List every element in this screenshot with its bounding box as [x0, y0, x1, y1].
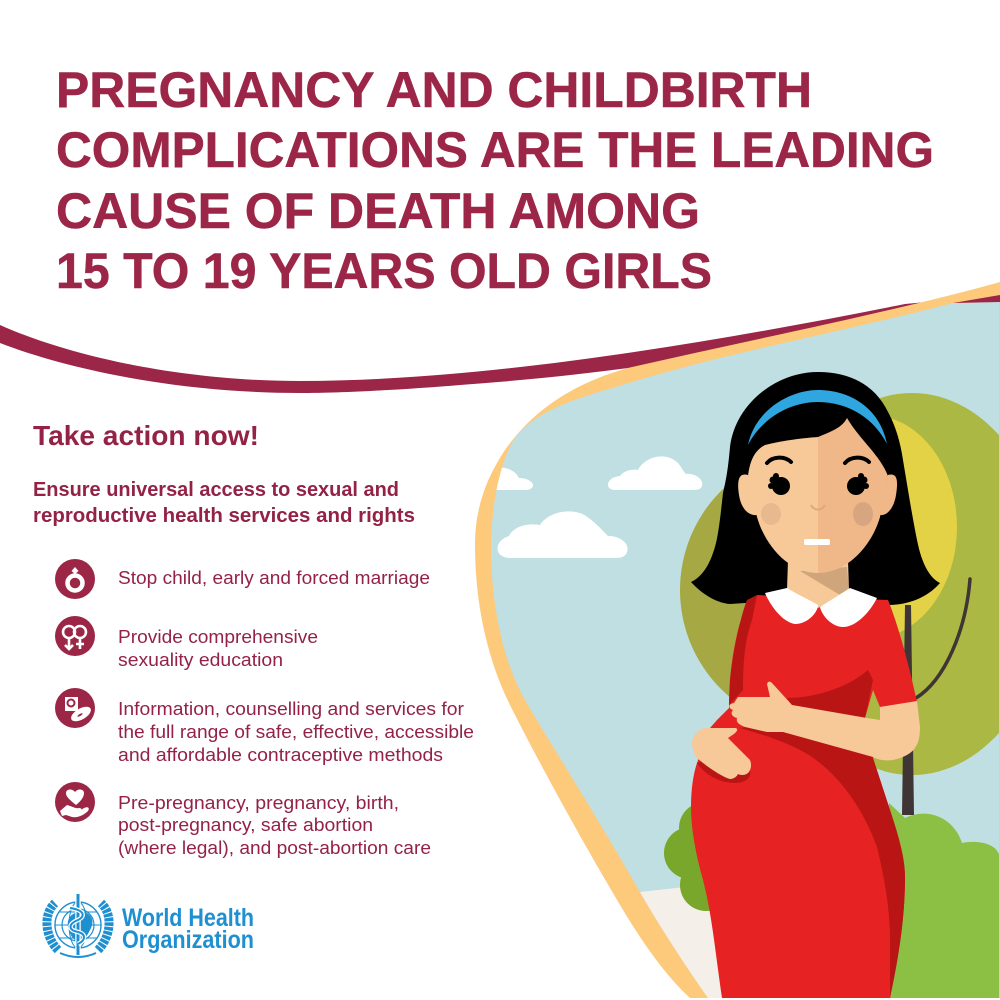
neck shadow — [800, 567, 849, 595]
action item: marriage — [55, 559, 430, 599]
hairband — [748, 390, 887, 445]
action item: education — [55, 616, 318, 670]
title: COMPLICATIONS ARE THE LEADING — [56, 122, 934, 178]
icon: condom and pills — [55, 688, 95, 728]
subheading — [33, 479, 415, 527]
upper arm and hand — [729, 682, 920, 760]
organization name: World Health — [122, 904, 254, 932]
tree right crown — [866, 393, 999, 775]
organization name: Organization — [122, 926, 254, 954]
cloud large — [497, 511, 628, 558]
left bush — [664, 806, 710, 911]
mouth — [804, 539, 830, 545]
call to action heading: Take action now! — [33, 420, 259, 451]
subheading: reproductive health services and rights — [33, 505, 415, 527]
waist shadow — [787, 670, 873, 718]
action item: care: post-pregnancy, safe abortion — [118, 815, 373, 835]
sky panel — [491, 302, 999, 998]
peach frame — [475, 282, 1000, 998]
title — [56, 62, 934, 299]
tree branch — [916, 579, 970, 698]
neck — [787, 560, 849, 608]
WHO logo — [47, 894, 254, 957]
lower hand — [692, 728, 751, 779]
action item: contraception: Information, counselling and services for — [118, 699, 464, 719]
action item: contraception: and affordable contraceptive methods — [118, 745, 443, 765]
cloud small — [496, 468, 533, 490]
right bush — [880, 803, 1000, 1000]
action item: care — [55, 782, 431, 858]
sun yellow — [890, 418, 957, 632]
action item: care: Pre-pregnancy, pregnancy, birth, — [118, 793, 399, 813]
dress shoulder shadow — [729, 595, 757, 705]
face — [748, 418, 888, 573]
icon: WHO emblem — [47, 894, 109, 957]
ears — [738, 474, 897, 515]
nose — [811, 505, 825, 510]
maroon swoosh — [0, 295, 1000, 393]
action item: care: (where legal), and post-abortion care — [118, 838, 431, 858]
action item: contraception — [55, 688, 474, 765]
maroon tip — [953, 295, 1000, 303]
woman — [691, 372, 940, 998]
tree left crown — [680, 488, 746, 696]
eyes — [768, 473, 869, 495]
cheeks — [761, 502, 873, 526]
eyebrows — [767, 458, 869, 463]
title: 15 TO 19 YEARS OLD GIRLS — [56, 243, 712, 299]
illustration scene — [488, 295, 1000, 1000]
background scene — [488, 393, 1000, 1000]
title: PREGNANCY AND CHILDBIRTH — [56, 62, 812, 118]
tree trunk — [902, 605, 914, 815]
action item: marriage: Stop child, early and forced marriage — [118, 568, 430, 588]
organization name — [122, 904, 254, 954]
title: CAUSE OF DEATH AMONG — [56, 183, 700, 239]
subheading: Ensure universal access to sexual and — [33, 479, 399, 501]
collar — [765, 588, 877, 627]
dress bodice and skirt — [691, 595, 917, 998]
icon: ring — [55, 559, 95, 599]
hair — [691, 372, 940, 605]
ground — [640, 888, 722, 998]
hand shadow — [697, 755, 750, 783]
action item: contraception: the full range of safe, effective, accessible — [118, 722, 474, 742]
action item: education: Provide comprehensive — [118, 627, 318, 647]
icon: heart in hand — [55, 782, 95, 822]
action item: education: sexuality education — [118, 650, 283, 670]
belly shadow — [740, 720, 905, 998]
dress — [691, 595, 917, 998]
icon: gender symbols — [55, 616, 95, 656]
cloud middle — [608, 456, 702, 490]
